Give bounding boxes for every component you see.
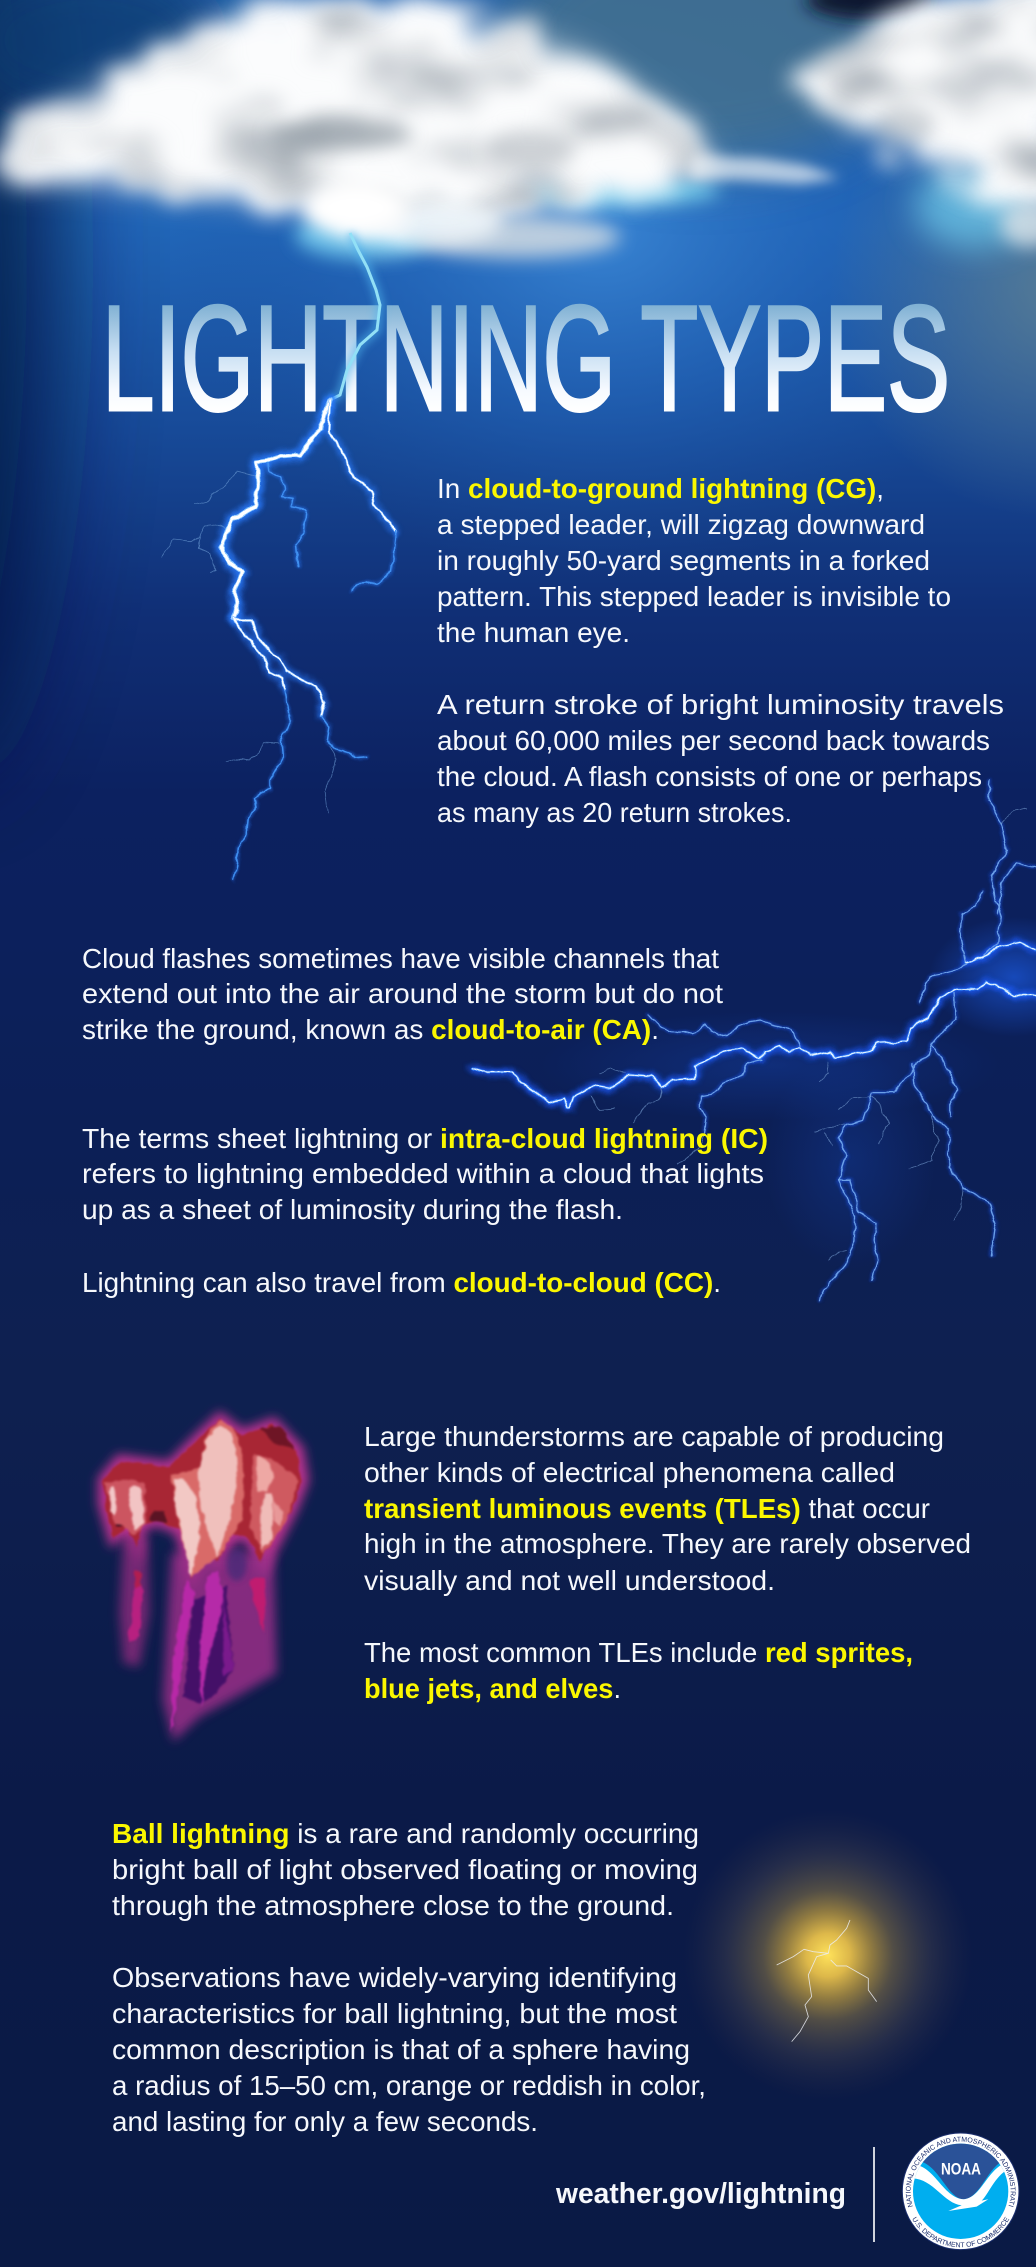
logo: NOAA seal: U.S. DEPARTMENT OF COMMERCE bbox=[912, 2216, 1010, 2248]
lightning: cloud-to-ground bolt bbox=[162, 233, 396, 880]
illustration: ball lightning bbox=[683, 1810, 973, 2100]
text: ball lightning description: Ball lightning is a rare and randomly occurring bbox=[112, 1818, 699, 1849]
text: transient luminous events description bbox=[364, 1421, 971, 1704]
footer divider bbox=[873, 2147, 875, 2242]
text: transient luminous events description: Large thunderstorms are capable of producing bbox=[364, 1421, 944, 1452]
text: cloud-to-cloud description: Lightning can also travel from cloud-to-cloud (CC). bbox=[82, 1267, 721, 1298]
footer url: weather.gov/lightning bbox=[555, 2178, 846, 2210]
text: cloud-to-ground description: a stepped leader, will zigzag downward bbox=[437, 509, 925, 540]
text: intra-cloud description bbox=[82, 1123, 768, 1225]
text: intra-cloud description: refers to lightning embedded within a cloud that lights bbox=[82, 1158, 764, 1189]
text: cloud-to-ground description bbox=[437, 473, 1004, 828]
text: transient luminous events description: The most common TLEs include red sprites, bbox=[364, 1637, 913, 1668]
text: cloud-to-ground description: the cloud. A flash consists of one or perhaps bbox=[437, 761, 982, 792]
text: ball lightning description: and lasting for only a few seconds. bbox=[112, 2106, 538, 2137]
lightning: horizontal cloud-to-air bolt with forks bbox=[472, 780, 1036, 1300]
text: ball lightning description: Observations have widely-varying identifying bbox=[112, 1962, 677, 1993]
text: cloud-to-air description bbox=[82, 943, 723, 1045]
text: cloud-to-air description: strike the ground, known as cloud-to-air (CA). bbox=[82, 1014, 659, 1045]
text: cloud-to-ground description: In cloud-to-ground lightning (CG), bbox=[437, 473, 884, 504]
text: transient luminous events description: other kinds of electrical phenomena called bbox=[364, 1457, 895, 1488]
text: cloud-to-ground description: in roughly 50-yard segments in a forked bbox=[437, 545, 930, 576]
text: cloud-to-ground description: as many as 20 return strokes. bbox=[437, 797, 792, 828]
text: cloud-to-ground description: the human eye. bbox=[437, 617, 630, 648]
logo: NOAA seal bbox=[902, 2132, 1020, 2250]
cloud: right storm cloud bbox=[785, 0, 1036, 247]
text: cloud-to-air description: Cloud flashes sometimes have visible channels that bbox=[82, 943, 719, 974]
logo: NOAA seal: NOAA bbox=[941, 2159, 981, 2178]
text: intra-cloud description: The terms sheet lightning or intra-cloud lightning (IC) bbox=[82, 1123, 768, 1154]
text: ball lightning description: common description is that of a sphere having bbox=[112, 2034, 690, 2065]
text: ball lightning description: a radius of 15–50 cm, orange or reddish in color, bbox=[112, 2070, 706, 2101]
text: transient luminous events description: transient luminous events (TLEs) that occur bbox=[364, 1493, 930, 1524]
text: ball lightning description: characteristics for ball lightning, but the most bbox=[112, 1998, 677, 2029]
text: ball lightning description: through the atmosphere close to the ground. bbox=[112, 1890, 674, 1921]
text: transient luminous events description: visually and not well understood. bbox=[364, 1565, 775, 1596]
text: cloud-to-ground description: A return stroke of bright luminosity travels bbox=[437, 689, 1004, 720]
text: ball lightning description: bright ball of light observed floating or moving bbox=[112, 1854, 698, 1885]
text: cloud-to-ground description: about 60,000 miles per second back towards bbox=[437, 725, 990, 756]
text: transient luminous events description: blue jets, and elves. bbox=[364, 1673, 621, 1704]
logo: NOAA seal: NATIONAL OCEANIC AND ATMOSPHERIC ADMINISTRATION bbox=[906, 2136, 1016, 2208]
text: transient luminous events description: high in the atmosphere. They are rarely observed bbox=[364, 1528, 971, 1559]
text: intra-cloud description: up as a sheet of luminosity during the flash. bbox=[82, 1194, 623, 1225]
text: cloud-to-ground description: pattern. This stepped leader is invisible to bbox=[437, 581, 951, 612]
cloud: main storm cloud bbox=[0, 0, 935, 259]
illustration: red sprite bbox=[103, 1418, 303, 1742]
text: ball lightning description bbox=[112, 1818, 706, 2137]
text: cloud-to-air description: extend out into the air around the storm but do not bbox=[82, 978, 723, 1009]
